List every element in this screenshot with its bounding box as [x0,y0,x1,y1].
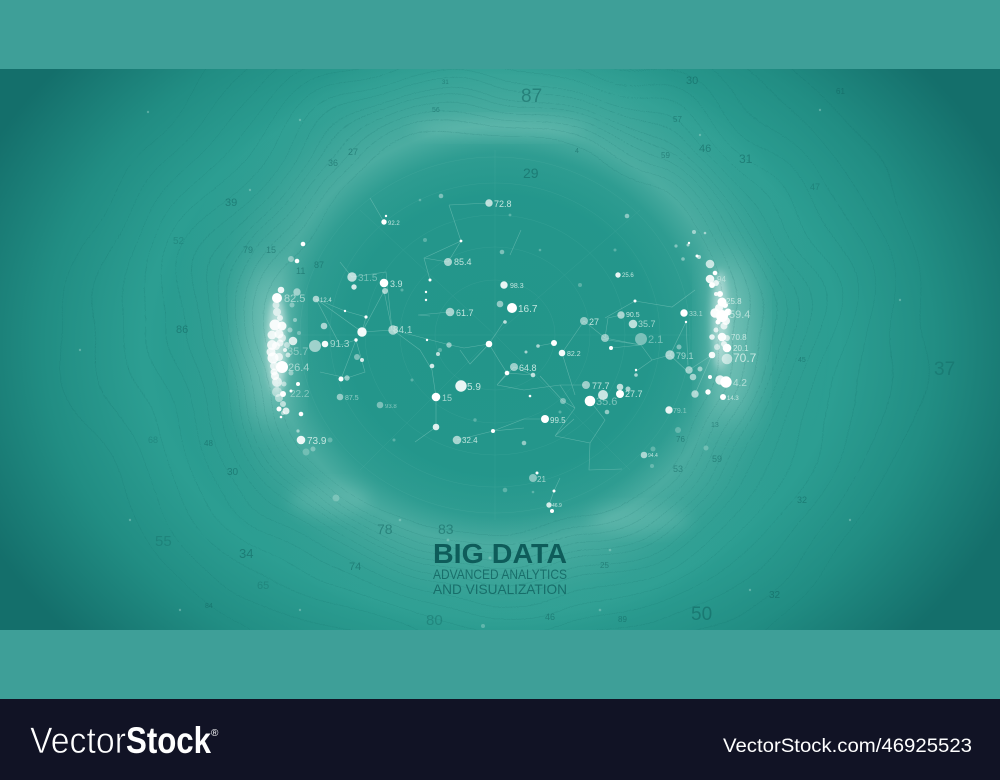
background numbers: 53 [673,464,683,474]
node value labels: 77.7 [592,381,610,391]
background numbers: 83 [438,521,454,537]
background gradient [0,69,1000,630]
background numbers: 34 [239,546,253,561]
node value labels: 5.9 [467,382,481,393]
background numbers: 36 [328,158,338,168]
background numbers: 52 [173,236,185,247]
node value labels: 64.8 [519,363,537,373]
background numbers: 27 [348,147,358,157]
glow ring [208,69,791,602]
stock image id: VectorStock.com/46925523 [723,736,972,757]
node value labels: 32.4 [462,436,478,445]
node value labels: 31.5 [358,273,378,284]
node value labels: 20.1 [733,344,749,353]
right data cluster [641,230,732,458]
background numbers: 39 [225,197,237,209]
node value labels: 94.4 [648,453,658,459]
node value labels: 15 [442,393,452,403]
background numbers: 47 [810,182,820,192]
node value labels: 16.7 [518,304,538,315]
panel: data visualization [0,69,1000,630]
node value labels: 93.8 [385,404,397,410]
node value labels: 82.2 [567,351,581,358]
node value labels: 35.7 [287,346,308,358]
node value labels: 14.3 [727,396,739,402]
background numbers: 15 [266,245,276,255]
node value labels: 22.2 [290,389,310,400]
background numbers: 45 [798,357,806,364]
registered mark: ® [211,728,219,739]
node value labels: 84.1 [393,325,413,336]
background numbers: 57 [673,115,682,124]
background numbers: 59 [661,151,670,160]
footer bar [0,699,1000,780]
background numbers: 74 [349,561,361,573]
node value labels: 4.2 [733,378,747,389]
node value labels: 25.6 [622,273,634,279]
faint scattered dots [79,109,901,628]
node value labels: 82.5 [284,293,305,305]
subtitle [433,570,566,594]
node value labels: 35.6 [596,396,617,408]
node value labels: 85.4 [454,257,472,267]
node value labels: 70.8 [731,333,747,342]
background numbers: 68 [148,435,158,445]
node value labels: 70.7 [733,351,757,365]
node value labels: 98.3 [510,283,524,290]
node value labels: 27 [589,317,599,327]
background numbers: 25 [600,561,609,570]
node value labels: 3.9 [390,279,403,289]
node value labels [284,199,757,509]
background numbers: 55 [155,533,172,550]
background numbers: 30 [686,75,698,87]
node value labels: 25.8 [726,297,742,306]
background numbers: 89 [618,615,627,624]
background numbers: 32 [797,495,807,505]
background numbers: 46 [545,612,555,622]
node value labels: 94 [717,275,726,284]
background numbers: 87 [521,86,542,107]
node value labels: 12.4 [320,298,332,304]
node value labels: 27.7 [625,389,643,399]
node value labels: 87.5 [345,395,359,402]
node value labels: 46.9 [552,503,562,509]
background numbers: 29 [523,165,539,181]
background numbers: 80 [426,612,443,629]
bottom band [0,630,1000,699]
contour lines [60,69,930,630]
background numbers: 56 [432,107,440,114]
background numbers: 61 [836,87,845,96]
network links [316,198,722,505]
background numbers: 50 [691,604,712,625]
title block [433,544,566,594]
node value labels: 99.5 [550,416,566,425]
node value labels: 26.4 [288,362,309,374]
node value labels: 91.3 [330,339,350,350]
background numbers: 31 [739,152,753,166]
node value labels: 2.1 [648,334,663,346]
background numbers: 87 [314,260,324,270]
background numbers: 37 [934,359,955,380]
background numbers: 4 [575,148,579,155]
node value labels: 92.2 [388,221,400,227]
node value labels: 33.1 [689,311,703,318]
title: BIG DATA: BIG DATA [433,538,567,569]
background numbers: 78 [377,521,393,537]
background numbers: 65 [257,580,269,592]
background numbers: 13 [711,422,719,429]
left data cluster [266,242,328,452]
node value labels: 72.8 [494,199,512,209]
top band [0,0,1000,69]
subtitle: ADVANCED ANALYTICS [433,566,567,582]
background numbers: 76 [676,435,685,444]
node value labels: 79.1 [676,351,694,361]
subtitle: AND VISUALIZATION [433,581,567,597]
node value labels: 21 [537,475,546,484]
central data nodes [313,194,647,513]
inner polar grid [300,150,690,520]
background numbers: 32 [769,590,781,601]
node value labels: 73.9 [307,436,327,447]
background numbers: 31 [442,80,449,86]
background numbers: 86 [176,324,188,336]
node value labels: 35.7 [638,319,656,329]
node value labels: 90.5 [626,312,640,319]
background numbers: 11 [296,266,305,276]
background numbers: 79 [243,245,253,255]
background numbers: 84 [205,603,213,610]
node value labels: 59.4 [729,309,750,321]
background numbers: 59 [712,454,722,464]
node value labels: 79.1 [673,408,687,415]
background numbers: 46 [699,143,711,155]
background numbers [148,75,955,629]
node value labels: 61.7 [456,308,474,318]
background numbers: 48 [204,439,213,448]
VectorStock logo: VectorStock [30,720,211,761]
background numbers: 30 [227,467,239,478]
